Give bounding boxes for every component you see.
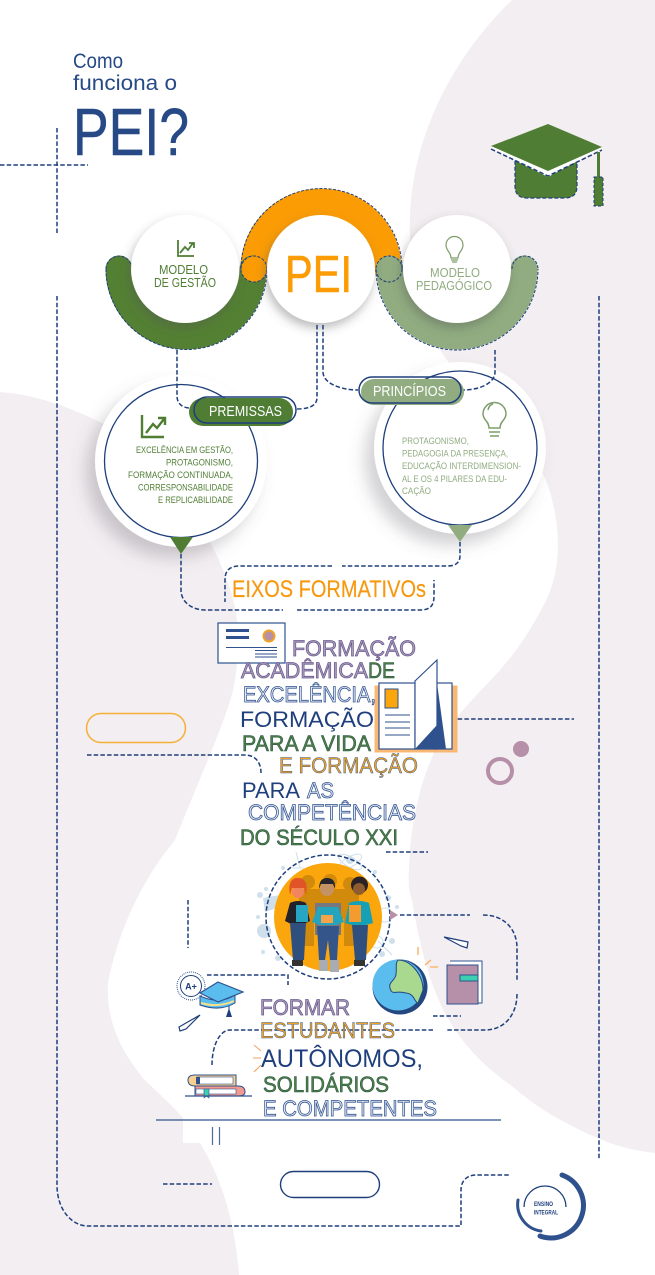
icon: open book — [375, 660, 457, 752]
text: eixos statement: PARA A VIDA — [242, 731, 371, 756]
panel: premissas — [95, 375, 267, 554]
orange disc — [274, 863, 382, 971]
connectors: arcs to pills — [177, 325, 495, 610]
icon: globe — [372, 947, 438, 1014]
student right — [345, 876, 373, 966]
text: premissas list: PROTAGONISMO, — [166, 458, 233, 468]
text: eixos statement: E FORMAÇÃO — [279, 753, 418, 778]
text: premissas list: E REPLICABILIDADE — [158, 495, 233, 505]
text: eixos statement: DO SÉCULO XXI — [240, 825, 398, 850]
text: princípios list: AL E OS 4 PILARES DA EDU- — [402, 474, 507, 484]
text: premissas list — [128, 445, 233, 505]
icon: light bulb — [483, 402, 506, 436]
decorative circles — [488, 741, 529, 783]
arc: green — [119, 269, 253, 336]
icon: growth chart — [142, 415, 165, 437]
title: funciona o — [73, 72, 177, 95]
text: eixos statement: FORMAÇÃO — [292, 636, 416, 661]
icon: stack of books — [185, 1075, 252, 1098]
background silhouettes — [299, 874, 359, 946]
circle: modelo pedagógico — [403, 215, 511, 323]
logo: ensino integral — [518, 1175, 583, 1238]
pointer: premissas — [170, 537, 193, 554]
title: PEI? — [73, 95, 189, 170]
circle: PEI — [267, 215, 375, 323]
circle: PEI: PEI — [285, 246, 352, 304]
text: premissas list: FORMAÇÃO CONTINUADA, — [128, 470, 233, 480]
pill: empty orange — [86, 714, 186, 742]
pill: princípios — [359, 377, 464, 405]
icon: graduation cap — [490, 124, 603, 206]
text: princípios list: CAÇÃO — [402, 486, 431, 496]
text: princípios list: PROTAGONISMO, — [402, 436, 469, 446]
text: eixos statement: DE — [368, 658, 395, 683]
title: Como — [73, 50, 123, 73]
text: eixos statement: PARA — [242, 778, 300, 803]
text: princípios list: PEDAGOGIA DA PRESENÇA, — [402, 448, 508, 458]
pale science doodles — [256, 856, 399, 961]
icon: notebook — [447, 961, 482, 1004]
text: formar estudantes: ESTUDANTES — [260, 1018, 395, 1043]
pill: premissas: PREMISSAS — [209, 403, 282, 420]
text: eixos statement: AS — [307, 778, 334, 803]
panel: princípios — [374, 362, 546, 542]
frame: dashed guide lines — [0, 128, 599, 1226]
vertical double bar — [212, 1127, 220, 1145]
text: princípios list — [402, 436, 521, 496]
text: formar estudantes — [260, 995, 437, 1121]
text: formar estudantes: SOLIDÁRIOS — [263, 1072, 389, 1097]
text: formar estudantes: FORMAR — [260, 995, 350, 1020]
diagram: PEI arcs and circles — [106, 189, 538, 350]
heading: eixos formativos: EIXOS FORMATIVOs — [232, 576, 426, 603]
icon: certificate card — [218, 623, 285, 663]
text: princípios list: EDUCAÇÃO INTERDIMENSION- — [402, 461, 521, 471]
logo: ensino integral: ENSINO — [534, 1201, 553, 1208]
text: eixos statement: COMPETÊNCIAS — [248, 800, 416, 825]
pill: empty navy — [280, 1172, 380, 1198]
icon: paper plane left — [179, 1015, 200, 1031]
arc: light green — [390, 269, 524, 336]
text: formar estudantes: E COMPETENTES — [263, 1096, 437, 1121]
arrow: students to right loop — [212, 910, 517, 1065]
text: eixos statement: FORMAÇÃO — [240, 707, 374, 732]
text: premissas list: CORRESPONSABILIDADE — [138, 482, 233, 492]
background: right lavender wave — [409, 0, 655, 1153]
pointer: princípios — [448, 525, 472, 542]
logo: ensino integral: INTEGRAL — [534, 1210, 558, 1216]
text: eixos statement: EXCELÊNCIA, — [243, 682, 376, 707]
icon: paper plane right — [444, 937, 468, 948]
text: formar estudantes: AUTÔNOMOS, — [261, 1044, 423, 1073]
text: eixos statement — [240, 636, 418, 850]
arc outlines — [106, 189, 538, 350]
text: premissas list: EXCELÊNCIA EM GESTÃO, — [136, 445, 233, 455]
text: eixos statement: ACADÊMICA — [241, 658, 368, 683]
circle: modelo pedagógico: MODELO — [430, 265, 480, 280]
rays beside text — [253, 1045, 261, 1072]
pill: premissas — [189, 397, 296, 426]
dashed ring — [266, 855, 390, 979]
arc: orange — [254, 202, 388, 269]
circle: modelo de gestão: MODELO — [159, 262, 208, 277]
divider line — [156, 1119, 501, 1121]
student center — [312, 878, 344, 972]
background: left lavender wave — [0, 392, 239, 1275]
student left — [285, 878, 310, 966]
illustration: students — [256, 851, 399, 979]
icon: A+ graduation cap: A+ — [185, 982, 197, 992]
circle: modelo de gestão — [131, 215, 239, 323]
circle: modelo pedagógico: PEDAGÓGICO — [416, 278, 492, 293]
circle: modelo de gestão: DE GESTÃO — [154, 275, 216, 290]
title — [73, 50, 189, 170]
icon: A+ graduation cap — [177, 972, 243, 1017]
pill: princípios: PRINCÍPIOS — [373, 383, 446, 400]
